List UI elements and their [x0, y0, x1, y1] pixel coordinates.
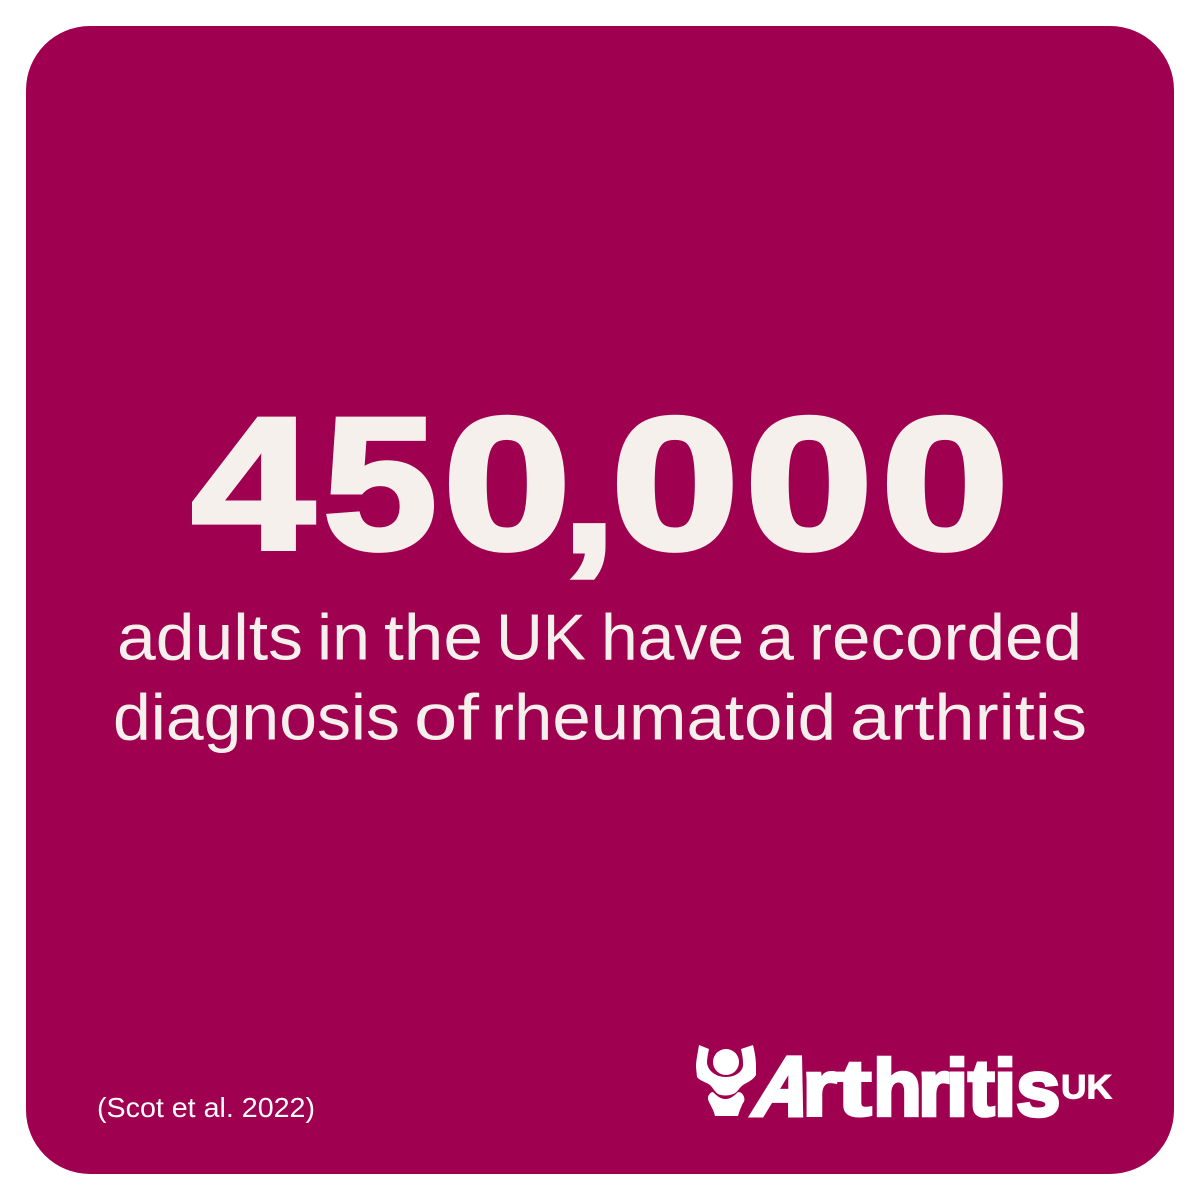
description text: [113, 600, 1087, 754]
description line 2: [113, 680, 1087, 754]
headline number: [192, 378, 1009, 589]
headline number: 0: [611, 379, 739, 589]
icon: figure with raised arms: [696, 1045, 756, 1116]
wordmark: Arthritis: t: [837, 1043, 872, 1133]
description line 2: arthritis: [850, 680, 1087, 754]
wordmark: UK: UK: [1061, 1068, 1112, 1106]
description line 2: diagnosis: [113, 680, 400, 754]
headline number: 0: [745, 379, 873, 589]
headline number: ,: [563, 398, 615, 588]
description line 1: in: [317, 600, 370, 674]
description line 1: UK: [496, 600, 586, 674]
description line 1: have: [601, 600, 744, 674]
headline number: 0: [443, 379, 571, 589]
source citation: (Scot et al. 2022): [97, 1092, 315, 1123]
wordmark: Arthritis: A: [745, 1039, 825, 1133]
logo: Arthritis UK: [696, 1039, 1112, 1133]
headline number: 0: [881, 379, 1009, 589]
headline number: 4: [192, 379, 314, 589]
wordmark: Arthritis: r: [802, 1043, 837, 1132]
description line 1: a: [757, 600, 795, 674]
description line 1: recorded: [809, 600, 1082, 674]
description line 1: [117, 600, 1082, 674]
description line 2: of: [414, 680, 480, 754]
description line 2: rheumatoid: [491, 680, 836, 754]
wordmark: Arthritis: hritis: [873, 1044, 1060, 1132]
description line 1: the: [384, 600, 483, 674]
wordmark: Arthritis: [745, 1039, 1060, 1133]
description line 1: adults: [117, 600, 303, 674]
headline number: 5: [323, 378, 437, 589]
